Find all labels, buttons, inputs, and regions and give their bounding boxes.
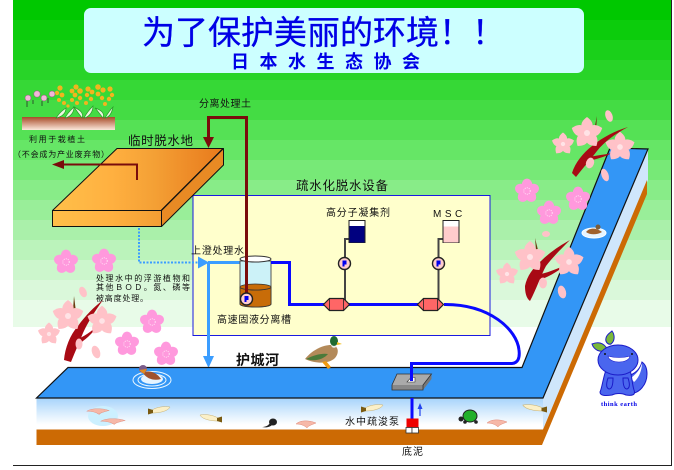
- icon: plants and soil: [22, 84, 115, 130]
- icon: turtle: [458, 410, 478, 424]
- icon: fish 1: [148, 407, 170, 414]
- icon: fish 3: [361, 405, 383, 412]
- title: 为了保护美丽的环境！！: [142, 14, 505, 51]
- explanatory note: 被高度处理。: [96, 293, 148, 303]
- icon: shrimp 2: [487, 420, 507, 427]
- label: reuse as planting soil: 利用于栽植土: [29, 134, 85, 144]
- mouth: [608, 356, 630, 362]
- sky gradient background: [13, 0, 671, 327]
- water surface: [36, 148, 648, 398]
- icon: polymer tank and feed line: [324, 220, 365, 310]
- explanatory note: 其他ＢＯＤ。氮、磷等: [96, 282, 190, 292]
- label: separated soil: 分离处理土: [199, 97, 251, 110]
- label: tank name: 高速固液分离槽: [217, 313, 291, 326]
- icon: tank pump: [240, 293, 252, 305]
- title banner: [84, 8, 584, 73]
- arrow: soil to planting use: [52, 160, 137, 180]
- body: [600, 370, 635, 396]
- explanatory note: [96, 273, 190, 303]
- icon: koi pair: [87, 406, 125, 426]
- subtitle: 日本水生态协会: [231, 51, 420, 72]
- sediment: [36, 180, 647, 445]
- moat channel: [36, 148, 648, 445]
- icon: dredging pump: [406, 398, 422, 433]
- icon: mallard duck: [305, 336, 342, 369]
- eyes: [604, 353, 606, 355]
- leaves: [592, 343, 606, 351]
- icon: temporary dewatering slab: [52, 148, 224, 226]
- icon: tadpole: [262, 418, 277, 427]
- arrow: supernatant path: [139, 228, 240, 368]
- icon: left cherry branch and blossoms: [37, 249, 179, 367]
- side wall: [543, 149, 648, 429]
- panel: dewatering equipment: [193, 196, 490, 336]
- icon: top right cherry branch: [551, 109, 636, 182]
- icon: shrimp 1: [296, 421, 316, 428]
- head: [598, 345, 638, 375]
- icon: right magenta blossoms: [514, 179, 591, 226]
- tail: [628, 362, 647, 394]
- label: polymer coagulant: 高分子凝集剂: [326, 206, 390, 219]
- explanatory note: 处理水中的浮游植物和: [96, 273, 190, 283]
- blue pipe: [271, 262, 519, 380]
- arms: [607, 378, 613, 389]
- label: temporary dewatering site: 临时脱水地: [128, 133, 193, 148]
- label: supernatant water: 上澄处理水: [191, 244, 244, 257]
- icon: fish 4: [523, 405, 547, 412]
- chart: high speed separation tank: [240, 117, 271, 307]
- icon: think earth mascot: [592, 331, 647, 396]
- icon: middle cherry branch: [495, 231, 585, 301]
- label: MSC: MSC: [433, 209, 466, 220]
- arrow: separated soil to dewatering site: [203, 118, 246, 300]
- front wall: [36, 398, 543, 430]
- label: sediment: 底泥: [402, 445, 423, 458]
- label: not industrial waste: （不会成为产业废弃物）: [13, 149, 109, 159]
- icon: MSC tank and feed line: [418, 220, 459, 310]
- icon: pump plate: [392, 363, 432, 390]
- label: dredging pump: 水中疏浚泵: [345, 415, 399, 428]
- icon: mandarin duck: [133, 365, 171, 388]
- icon: mandarin duck upper channel: [582, 224, 606, 238]
- icon: fish 2: [200, 415, 222, 422]
- label: moat: 护城河: [236, 352, 279, 368]
- label: think earth: think earth: [601, 401, 637, 408]
- label: dewatering equipment: 疏水化脱水设备: [296, 178, 388, 193]
